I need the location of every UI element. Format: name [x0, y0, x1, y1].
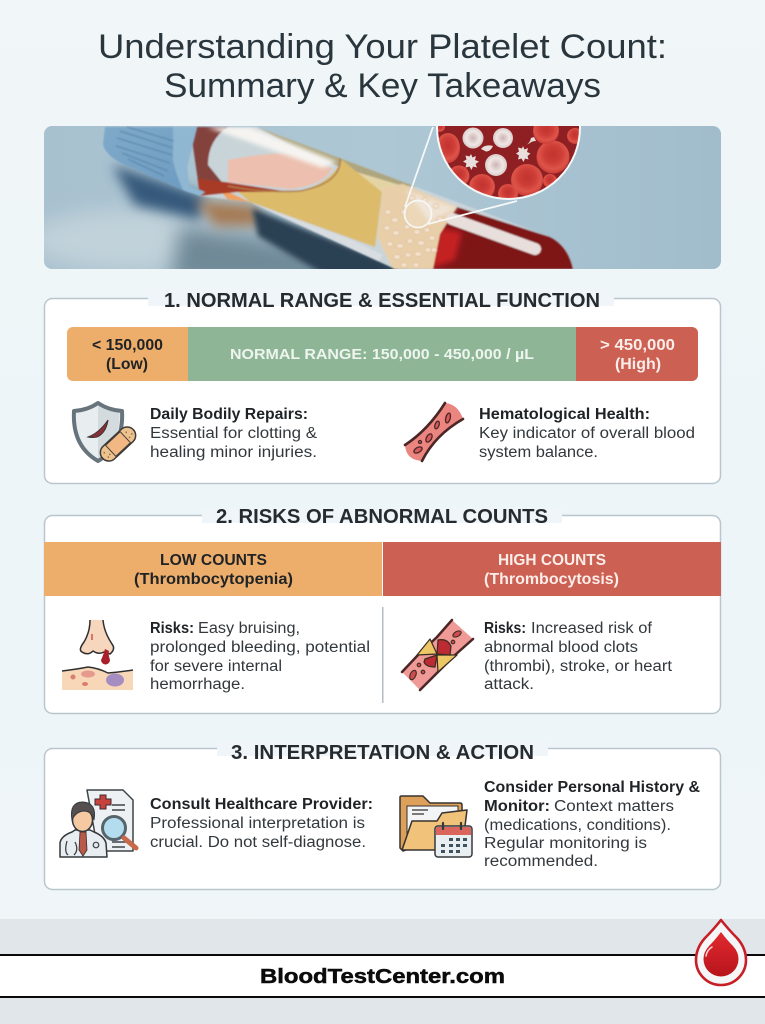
header: low counts: LOW COUNTS [160, 552, 267, 569]
title: Understanding Your Platelet Count: [98, 28, 667, 66]
header: high counts: (Thrombocytosis) [484, 571, 619, 588]
text: consult healthcare provider: Consult Healthcare Provider: [150, 796, 373, 813]
text: low count risks: hemorrhage. [150, 676, 245, 693]
range bar: < 150,000 [92, 337, 163, 354]
text: low count risks: for severe internal [150, 658, 282, 675]
text: consult healthcare provider [150, 796, 373, 851]
text: daily bodily repairs: Essential for clotting & [150, 425, 318, 442]
text: hematological health: Hematological Health: [479, 406, 650, 423]
text: personal history and monitor: Monitor: [484, 798, 550, 815]
text: low count risks: prolonged bleeding, potential [150, 639, 370, 656]
text: personal history and monitor: Consider Personal History & [484, 779, 700, 796]
text: hematological health: Key indicator of overall blood [479, 425, 695, 442]
text: personal history and monitor: Context matters [554, 798, 674, 815]
text: hematological health: system balance. [479, 444, 598, 461]
text: personal history and monitor: (medications, conditions). [484, 817, 671, 834]
icon: blood drop logo [696, 920, 746, 985]
range bar: (Low) [106, 356, 148, 373]
text: low count risks: Risks: [150, 620, 194, 637]
text: high count risks: (thrombi), stroke, or heart [484, 658, 673, 675]
title: Summary & Key Takeaways [164, 67, 601, 105]
range bar [67, 327, 698, 381]
heading: section 2: 2. RISKS OF ABNORMAL COUNTS [216, 506, 548, 528]
text: consult healthcare provider: Professional interpretation is [150, 815, 365, 832]
icon: shield with bandage [74, 403, 139, 465]
icon: blood vessel [405, 403, 463, 461]
text: daily bodily repairs: Daily Bodily Repairs: [150, 406, 308, 423]
icon: folder with calendar [400, 796, 472, 857]
text: high count risks: abnormal blood clots [484, 639, 638, 656]
text: personal history and monitor: recommended. [484, 853, 598, 870]
header: low counts [44, 542, 382, 596]
text: low count risks [150, 620, 370, 693]
text: personal history and monitor: Regular monitoring is [484, 835, 647, 852]
icon: doctor with report and magnifier [60, 790, 136, 857]
text: high count risks: attack. [484, 676, 534, 693]
text: daily bodily repairs: healing minor injuries. [150, 444, 317, 461]
text: high count risks [484, 620, 673, 693]
header: high counts [383, 542, 721, 596]
range bar: > 450,000 [600, 337, 675, 354]
text: high count risks: Increased risk of [531, 620, 653, 637]
text: low count risks: Easy bruising, [198, 620, 300, 637]
text: consult healthcare provider: crucial. Do not self-diagnose. [150, 834, 366, 851]
heading: section 3: 3. INTERPRETATION & ACTION [231, 742, 534, 764]
text: hematological health [479, 406, 695, 461]
text: high count risks: Risks: [484, 620, 526, 637]
panel: normal range and essential function [44, 290, 720, 484]
footer band [0, 919, 765, 1024]
icon: nosebleed and bruised skin [62, 620, 133, 690]
header: high counts: HIGH COUNTS [498, 552, 606, 569]
text: personal history and monitor [484, 779, 700, 870]
header: low counts: (Thrombocytopenia) [134, 571, 293, 588]
panel: interpretation and action [44, 740, 720, 890]
heading: section 1: 1. NORMAL RANGE & ESSENTIAL FUNCTION [164, 290, 600, 312]
title [98, 28, 667, 105]
footer brand name: BloodTestCenter.com [260, 966, 505, 988]
icon: blood clot in vessel [402, 620, 473, 690]
text: daily bodily repairs [150, 406, 318, 461]
panel: risks of abnormal counts [44, 506, 721, 714]
hero image: blood test tube with magnified platelets [44, 126, 721, 269]
range bar: (High) [615, 356, 661, 373]
range bar: NORMAL RANGE: 150,000 - 450,000 / µL [230, 346, 534, 363]
